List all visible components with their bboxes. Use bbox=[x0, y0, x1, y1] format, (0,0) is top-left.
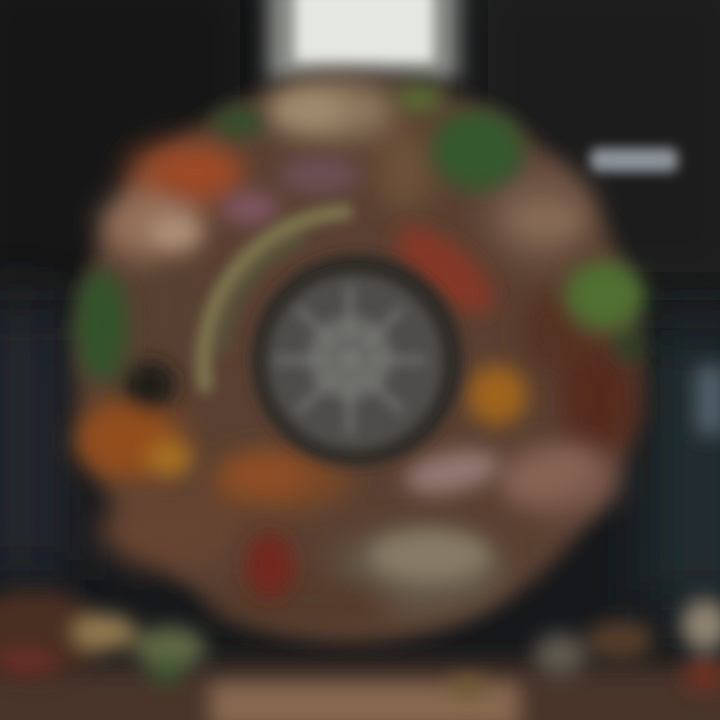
outer ring of food bbox=[75, 80, 640, 628]
blurred shape at right edge bbox=[696, 365, 720, 435]
food wheel bbox=[75, 78, 646, 642]
center dial detail bbox=[275, 285, 425, 435]
bright window at top bbox=[268, 0, 458, 80]
wooden table and scattered food bbox=[0, 590, 720, 720]
inner pale ring bbox=[203, 212, 345, 385]
center dial face bbox=[267, 274, 443, 450]
detailed food patches bbox=[76, 86, 646, 597]
center dial dark rim bbox=[251, 254, 463, 466]
wheel base disc bbox=[75, 78, 639, 642]
blurred label at upper right bbox=[590, 148, 678, 172]
